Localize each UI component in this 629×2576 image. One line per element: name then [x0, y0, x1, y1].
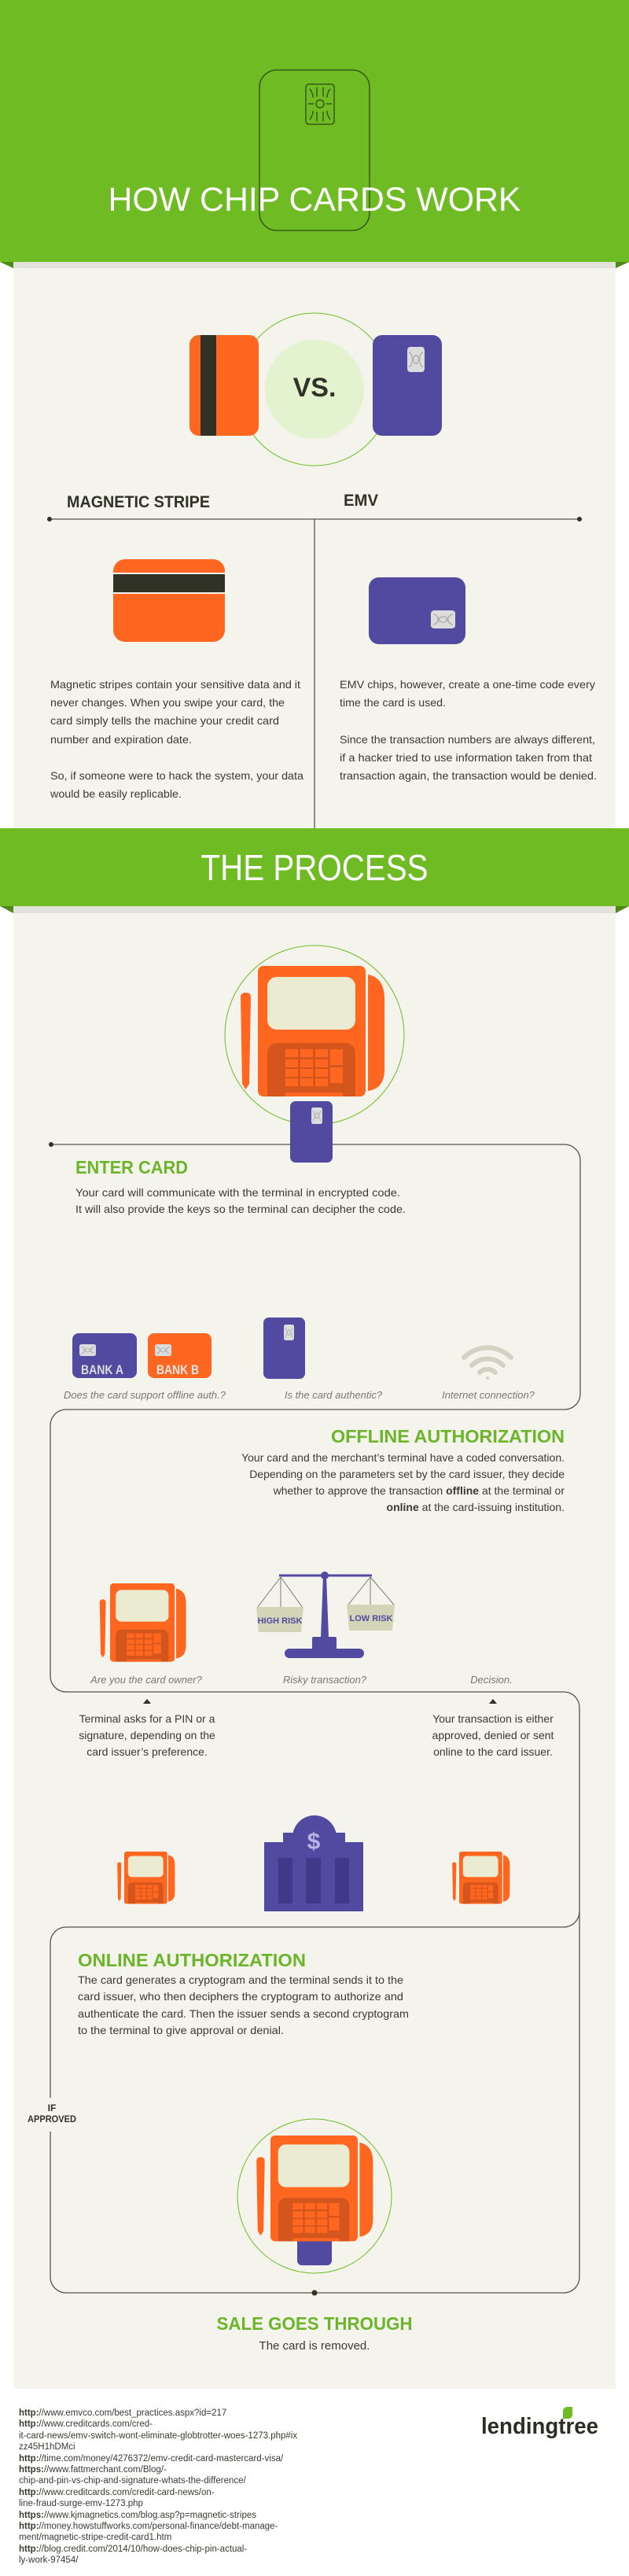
- text: magnetic stripe description: would be easily replicable.: [50, 787, 182, 800]
- text: enter card: It will also provide the keys so the terminal can decipher the code.: [75, 1203, 406, 1215]
- icon: authentic card: [263, 1317, 305, 1379]
- references: chip-and-pin-vs-chip-and-signature-whats-the-difference/: [19, 2476, 247, 2486]
- icon: small terminal left: [117, 1852, 175, 1903]
- text: magnetic stripe description: card simply tells the machine your credit card: [50, 714, 279, 727]
- captions: offline: Risky transaction?: [283, 1674, 367, 1686]
- arrow: pin note: [143, 1699, 151, 1704]
- text: pin note: signature, depending on the: [79, 1729, 215, 1741]
- heading: offline authorization: OFFLINE AUTHORIZATION: [331, 1426, 565, 1446]
- heading: online authorization: ONLINE AUTHORIZATION: [78, 1950, 306, 1970]
- text: online authorization: card issuer, who then deciphers the cryptogram to authorize and: [78, 1990, 403, 2003]
- heading: the process: THE PROCESS: [201, 847, 428, 888]
- icon: risk scale: LOW RISK: [349, 1614, 393, 1623]
- heading: enter card: ENTER CARD: [75, 1157, 188, 1177]
- text: decision note: Your transaction is either: [432, 1712, 554, 1725]
- references: http://blog.credit.com/2014/10/how-does-chip-pin-actual-: [19, 2545, 247, 2554]
- text: EMV description: Since the transaction numbers are always different,: [340, 733, 595, 746]
- captions: offline: Are you the card owner?: [90, 1674, 203, 1686]
- title: HOW CHIP CARDS WORK: [109, 181, 521, 219]
- references: ly-work-97454/: [19, 2556, 79, 2565]
- icon: EMV card: [369, 577, 465, 644]
- heading: EMV: EMV: [344, 492, 378, 510]
- text: online authorization: to the terminal to give approval or denial.: [78, 2024, 284, 2036]
- icon: small terminal right: [452, 1852, 509, 1903]
- panel: comparison background: [13, 262, 616, 828]
- references: [19, 2408, 297, 2565]
- icon: bank: $: [307, 1829, 321, 1855]
- references: line-fraud-surge-emv-1273.php: [19, 2499, 143, 2508]
- text: decision note: online to the card issuer.: [433, 1745, 553, 1758]
- captions: offline: [90, 1674, 513, 1686]
- text: decision note: approved, denied or sent: [432, 1729, 554, 1741]
- text: enter card: [75, 1186, 406, 1215]
- icon: terminal with card inserted: [225, 945, 404, 1163]
- text: magnetic stripe description: [50, 678, 303, 800]
- text: magnetic stripe description: never changes. When you swipe your card, the: [50, 696, 285, 709]
- header band: [0, 0, 629, 268]
- references: http://money.howstuffworks.com/personal-finance/debt-manage-: [19, 2522, 278, 2531]
- references: it-card-news/emv-switch-wont-eliminate-globtrotter-woes-1273.php#ix: [19, 2431, 297, 2441]
- icon: bank cards: [72, 1333, 212, 1378]
- icon: terminal card removed: [237, 2119, 392, 2273]
- captions: enter card: [64, 1389, 535, 1401]
- text: offline authorization: Your card and the merchant’s terminal have a coded conversation.: [241, 1451, 565, 1464]
- logo: lendingtree: lendingtree: [481, 2414, 598, 2439]
- process flow line: [49, 1142, 580, 2295]
- captions: enter card: Does the card support offline auth.?: [64, 1389, 226, 1401]
- references: http://www.emvco.com/best_practices.aspx?id=217: [19, 2408, 226, 2418]
- arrow: decision note: [489, 1699, 497, 1704]
- text: EMV description: transaction again, the transaction would be denied.: [340, 769, 597, 782]
- text: EMV description: [340, 678, 597, 782]
- text: pin note: [79, 1712, 215, 1758]
- references: http://www.creditcards.com/credit-card-news/on-: [19, 2488, 215, 2497]
- text: offline authorization: Depending on the parameters set by the card issuer, they decide: [249, 1468, 565, 1480]
- icon: bank cards: BANK B: [156, 1362, 199, 1377]
- text: EMV description: time the card is used.: [340, 696, 446, 709]
- text: enter card: Your card will communicate with the terminal in encrypted code.: [75, 1186, 400, 1199]
- vs graphic: VS.: [293, 373, 336, 403]
- label: if approved: APPROVED: [28, 2113, 76, 2125]
- icon: bank cards: BANK A: [81, 1362, 123, 1377]
- icon: bank: [264, 1815, 363, 1911]
- icon: risk scale: HIGH RISK: [258, 1616, 302, 1626]
- references: https://www.fattmerchant.com/Blog/-: [19, 2465, 167, 2475]
- icon: terminal (card owner): [100, 1583, 186, 1662]
- icon: chip card outline: [259, 70, 370, 230]
- text: offline authorization: whether to approve the transaction offline at the terminal or: [273, 1484, 565, 1497]
- label: if approved: IF: [48, 2102, 56, 2113]
- icon: magnetic stripe card: [113, 559, 225, 642]
- text: online authorization: [78, 1973, 409, 2036]
- text: EMV description: EMV chips, however, create a one-time code every: [340, 678, 595, 691]
- text: pin note: Terminal asks for a PIN or a: [79, 1712, 215, 1725]
- references: http://www.creditcards.com/cred-: [19, 2419, 153, 2429]
- text: magnetic stripe description: So, if someone were to hack the system, your data: [50, 769, 303, 782]
- process band: [0, 828, 629, 913]
- text: pin note: card issuer’s preference.: [86, 1745, 208, 1758]
- references: http://time.com/money/4276372/emv-credit-card-mastercard-visa/: [19, 2454, 284, 2464]
- heading: magnetic stripe: MAGNETIC STRIPE: [67, 493, 210, 511]
- text: card removed: The card is removed.: [259, 2339, 370, 2353]
- text: magnetic stripe description: Magnetic stripes contain your sensitive data and it: [50, 678, 300, 691]
- text: offline authorization: [241, 1451, 565, 1513]
- references: ment/magnetic-stripe-credit-card1.htm: [19, 2533, 171, 2542]
- text: online authorization: authenticate the card. Then the issuer sends a second cryptogram: [78, 2007, 409, 2020]
- references: zz45H1hDMci: [19, 2442, 75, 2452]
- icon: risk scale: [256, 1572, 395, 1658]
- captions: enter card: Is the card authentic?: [285, 1389, 383, 1401]
- text: online authorization: The card generates a cryptogram and the terminal sends it to the: [78, 1973, 403, 1986]
- label: if approved: [28, 2102, 76, 2125]
- icon: wifi: [464, 1347, 511, 1380]
- text: magnetic stripe description: number and expiration date.: [50, 733, 192, 746]
- vs graphic: [189, 313, 442, 466]
- text: decision note: [432, 1712, 554, 1758]
- text: EMV description: if a hacker tried to use information taken from that: [340, 751, 592, 764]
- panel: process background: [13, 906, 616, 2389]
- text: offline authorization: online at the card-issuing institution.: [387, 1501, 565, 1513]
- references: https://www.kjmagnetics.com/blog.asp?p=magnetic-stripes: [19, 2511, 256, 2520]
- heading: sale goes through: SALE GOES THROUGH: [217, 2313, 412, 2334]
- captions: enter card: Internet connection?: [442, 1389, 535, 1401]
- divider timeline: [47, 517, 582, 828]
- captions: offline: Decision.: [470, 1674, 513, 1686]
